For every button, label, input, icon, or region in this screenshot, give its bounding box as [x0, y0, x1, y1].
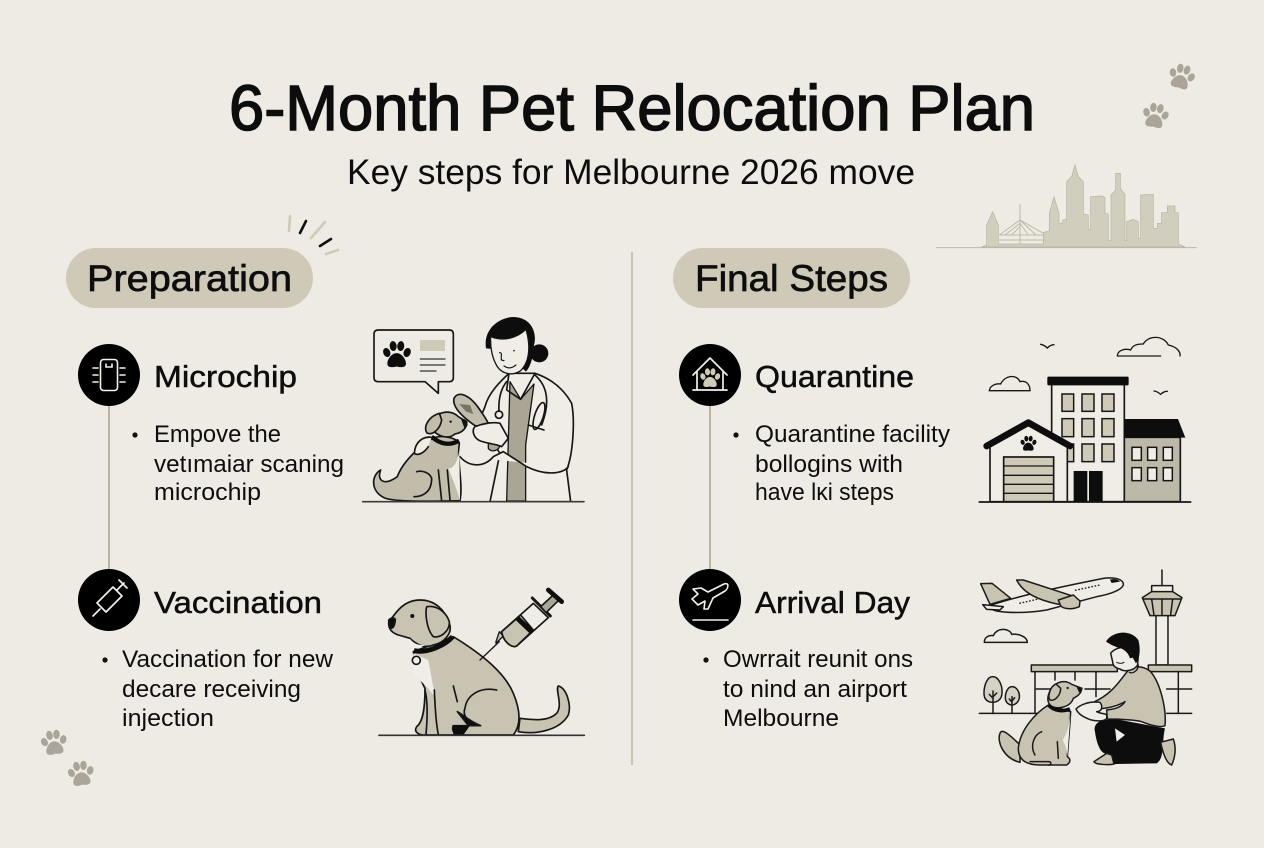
- icon: departing plane: [679, 569, 741, 631]
- step text: bollogins with: [755, 451, 903, 478]
- step text: Melbourne: [723, 705, 839, 732]
- step heading: Quarantine: [755, 359, 914, 394]
- illustration: airport reunion: [979, 570, 1192, 765]
- dog: [374, 412, 467, 501]
- heading: final steps: [673, 248, 910, 308]
- icon: paw prints bottom left: [38, 728, 97, 787]
- illustration: vet scanning dog: [363, 317, 584, 502]
- dog body: [389, 600, 569, 735]
- clouds and birds: [989, 337, 1180, 394]
- step text: have lκi steps: [755, 479, 894, 506]
- heading: preparation: Preparation: [87, 258, 292, 299]
- subtitle: Key steps for Melbourne 2026 move: [347, 153, 915, 192]
- dog: [999, 682, 1082, 765]
- step text: [703, 646, 913, 732]
- step: microchip: [78, 344, 344, 506]
- heading: preparation: [66, 248, 313, 308]
- step text: injection: [122, 705, 214, 732]
- terminal: [979, 665, 1192, 713]
- icon: microchip: [78, 344, 140, 406]
- step text: [733, 421, 950, 506]
- syringe: [480, 590, 562, 660]
- step text: decare receiving: [122, 676, 301, 703]
- step text: microchip: [154, 479, 261, 506]
- step text: Vaccination for new: [122, 646, 334, 673]
- illustration: quarantine facility: [979, 337, 1191, 502]
- microchip scanner: [454, 394, 508, 451]
- hospital tower: [1047, 377, 1129, 502]
- panel: preparation: [66, 248, 584, 735]
- heading: final steps: Final Steps: [695, 258, 888, 299]
- step text: Empove the: [154, 421, 281, 448]
- vet: [460, 317, 573, 502]
- step text: [102, 646, 334, 732]
- paw house: [987, 423, 1070, 502]
- step: vaccination: [78, 569, 334, 732]
- illustration: dog receiving injection: [379, 590, 584, 735]
- panel: final steps: [673, 248, 1192, 765]
- timeline connector: [108, 404, 110, 572]
- step text: [132, 421, 344, 506]
- step text: to nind an airport: [723, 676, 907, 703]
- decorative sparks: [289, 216, 338, 254]
- illustration: Melbourne skyline: [936, 165, 1197, 248]
- step heading: Microchip: [154, 359, 297, 394]
- speech bubble with paw: [374, 330, 453, 393]
- icon: syringe: [78, 569, 140, 631]
- title: 6-Month Pet Relocation Plan: [229, 72, 1035, 144]
- timeline connector: [709, 404, 711, 572]
- step text: Owrrait reunit ons: [723, 646, 913, 673]
- step text: vetımaiar scaning: [154, 451, 344, 478]
- step: arrival day: [679, 569, 913, 732]
- icon: quarantine house: [679, 344, 741, 406]
- cloud: [984, 629, 1027, 642]
- trees: [984, 677, 1019, 713]
- side building: [1124, 419, 1185, 502]
- step heading: Arrival Day: [755, 585, 910, 620]
- airplane: [981, 578, 1123, 612]
- step heading: Vaccination: [154, 585, 322, 620]
- column divider: [631, 252, 633, 765]
- person kneeling: [1076, 633, 1175, 765]
- step text: Quarantine facility: [755, 421, 950, 448]
- icon: paw prints top right: [1140, 61, 1198, 130]
- step: quarantine: [679, 344, 950, 506]
- control tower: [1142, 570, 1182, 665]
